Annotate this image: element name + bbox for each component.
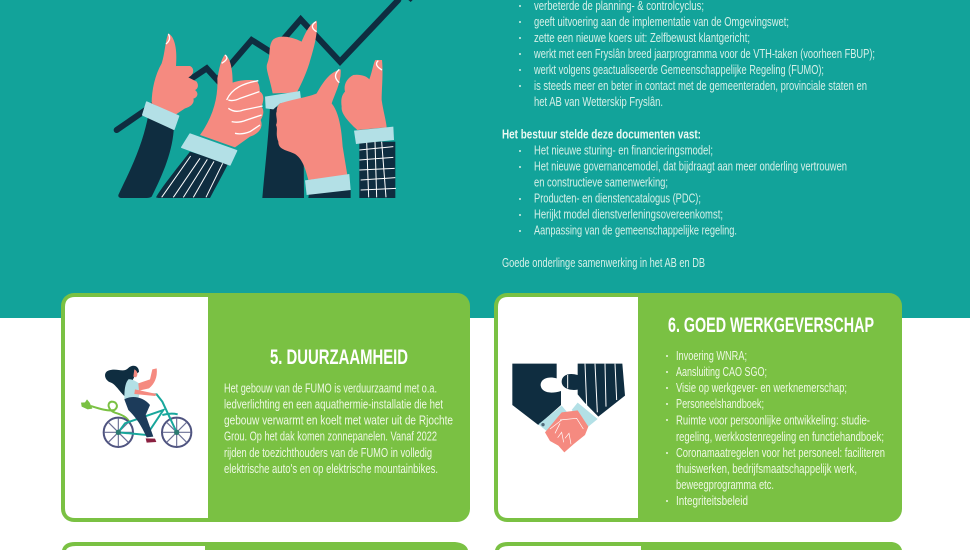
heading: 5. DUURZAAMHEID (270, 346, 408, 369)
text block: results list: Het nieuwe sturing- en financieringsmodel; (534, 144, 713, 158)
bullets: results (519, 5, 521, 232)
hand 1 (118, 33, 198, 198)
text block: results list: is steeds meer en beter in contact met de gemeenteraden, provinciale staten en (534, 79, 867, 93)
panel: next row right (cropped) (495, 542, 902, 550)
panel: 5. Duurzaamheid (61, 293, 470, 522)
bullets list: Personeelshandboek; (676, 397, 764, 411)
panel: 6. Goed werkgeverschap (494, 293, 902, 522)
illustration: thumbs up hands with rising chart line (117, 0, 413, 198)
body text: elektrische auto's en op elektrische mountainbikes. (224, 462, 438, 476)
text block: results list (502, 0, 875, 270)
bullets list: thuiswerken, bedrijfsmaatschappelijk werk, (676, 462, 857, 476)
hand 5 (341, 60, 396, 198)
text block: results list: het AB van Wetterskip Fryslân. (534, 95, 663, 109)
bullets list: Aansluiting CAO SGO; (676, 365, 767, 379)
icon: puzzle handshake (512, 364, 625, 452)
text block: results list: Goede onderlinge samenwerking in het AB en DB (502, 256, 705, 270)
body text: Het gebouw van de FUMO is verduurzaamd met o.a. (224, 382, 437, 396)
bullets list: Invoering WNRA; (676, 349, 747, 363)
body text: ledverlichting en een aquathermie-installatie die het (224, 398, 443, 412)
text block: results list: Het bestuur stelde deze documenten vast: (502, 128, 701, 142)
hand 2 (156, 54, 263, 198)
hand 4 (276, 69, 351, 198)
bullets list: Coronamaatregelen voor het personeel: faciliteren (676, 446, 885, 460)
body text: gebouw verwarmt en koelt met water uit de Rjochte (224, 414, 453, 428)
text block: results list: werkt volgens geactualiseerde Gemeenschappelijke Regeling (FUMO); (533, 63, 824, 77)
rising line chart (117, 0, 413, 130)
text block: results list: Producten- en dienstencatalogus (PDC); (534, 192, 701, 206)
text block: results list: Het nieuwe governancemodel, dat bijdraagt aan meer onderling vertrouwen (534, 160, 847, 174)
panel: next row left (cropped) (62, 542, 468, 550)
text block: results list: Herijkt model dienstverleningsovereenkomst; (534, 208, 723, 222)
bullets list: regeling, werkkostenregeling en functiehandboek; (676, 430, 884, 444)
bullets list: beweegprogramma etc. (676, 478, 774, 492)
icon: woman on electric bicycle (81, 366, 191, 447)
bullets list: Integriteitsbeleid (676, 494, 748, 508)
body text: rijden de toezichthouders van de FUMO in volledig (224, 446, 432, 460)
text block: results list: Aanpassing van de gemeenschappelijke regeling. (534, 224, 737, 238)
hand 3 (262, 21, 317, 198)
bullets list (666, 349, 885, 508)
bullets list: Ruimte voor persoonlijke ontwikkeling: studie- (676, 414, 870, 428)
heading: 6. GOED WERKGEVERSCHAP (668, 314, 874, 337)
text block: results list: en constructieve samenwerking; (534, 176, 668, 190)
body text (224, 382, 453, 476)
text block: results list: geeft uitvoering aan de implementatie van de Omgevingswet; (534, 15, 789, 29)
bullets list: Visie op werkgever- en werknemerschap; (676, 381, 847, 395)
text block: results list: zette een nieuwe koers uit: Zelfbewust klantgericht; (534, 31, 750, 45)
body text: Grou. Op het dak komen zonnepanelen. Vanaf 2022 (224, 430, 437, 444)
teal background band (0, 0, 970, 318)
